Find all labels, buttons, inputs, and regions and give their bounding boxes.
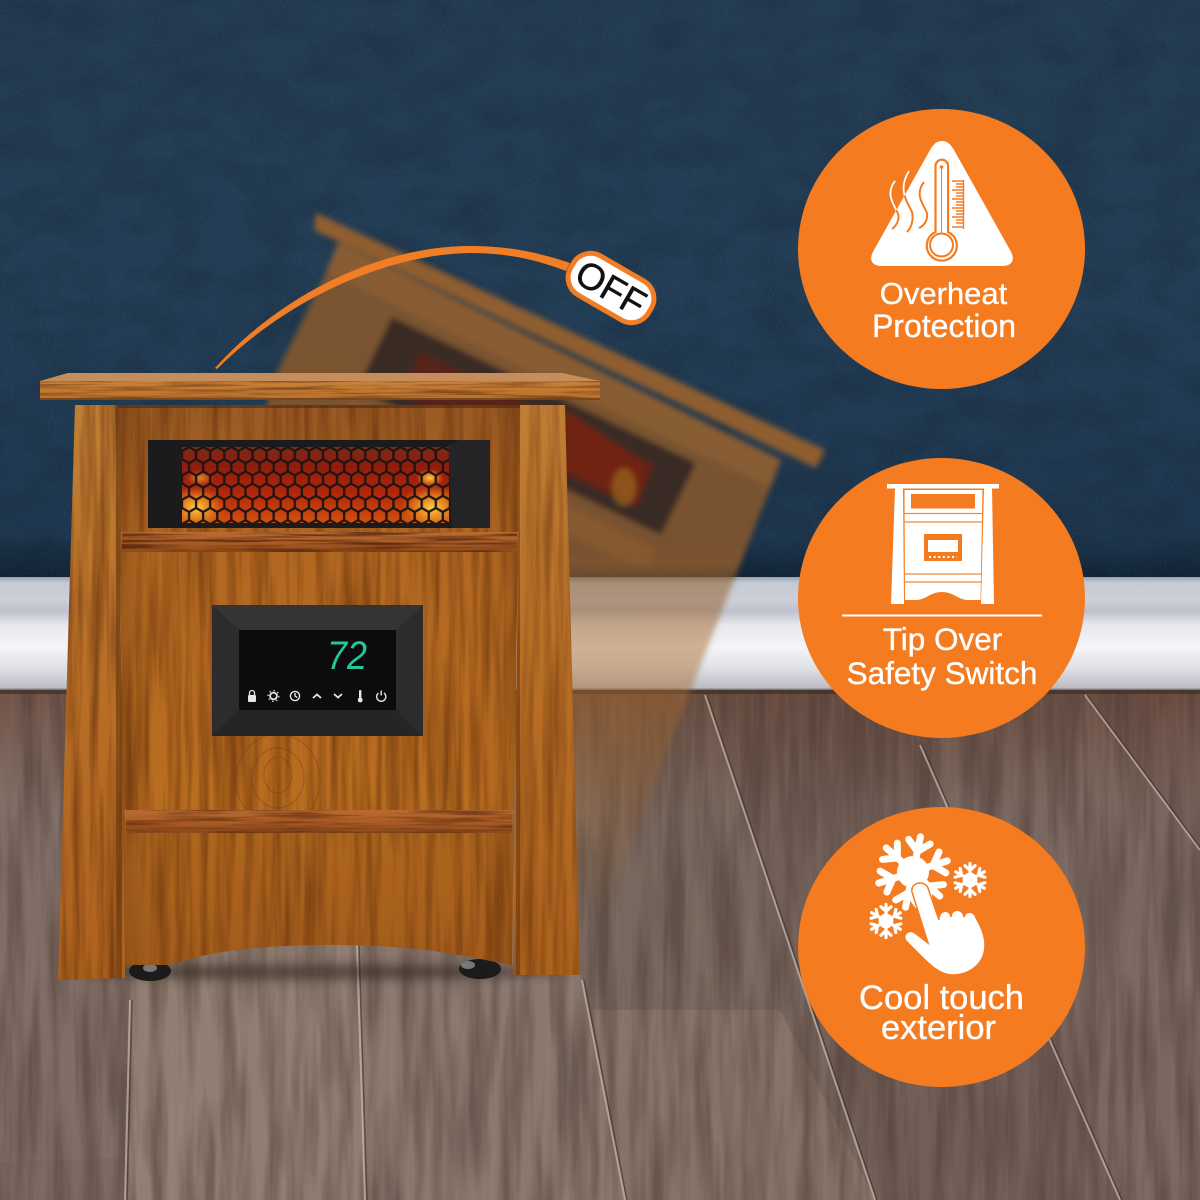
icon: pointing hand — [905, 883, 985, 975]
upper shelf rail — [121, 532, 518, 552]
background: wooden floor planks — [0, 688, 1200, 1200]
ghost heater top board — [314, 213, 825, 468]
label: tip over safety switch: Tip Over — [883, 621, 1002, 657]
heat waves inside triangle — [892, 181, 928, 233]
icon: small snowflake left — [869, 904, 903, 938]
label: tip over safety switch: Safety Switch — [847, 655, 1037, 691]
curved tilt arrow line — [215, 246, 570, 369]
label: overheat protection: Protection — [872, 308, 1016, 344]
main heater cabinet — [40, 373, 600, 985]
hexagonal glowing mesh — [182, 447, 449, 523]
caster wheel left — [129, 961, 171, 981]
feature badge: cool touch exterior — [798, 807, 1085, 1087]
caster wheel right — [459, 959, 501, 979]
button: power — [377, 690, 386, 701]
button: down — [334, 694, 342, 698]
icon: warning triangle with thermometer — [871, 141, 1013, 266]
heat waves outside triangle — [890, 171, 927, 232]
ghost heater body — [263, 242, 772, 870]
thermometer — [927, 160, 964, 261]
background: white baseboard — [0, 577, 1200, 691]
label: overheat protection: Overheat — [880, 276, 1008, 311]
icon: heater outline — [887, 484, 999, 604]
right leg — [513, 405, 580, 975]
button: timer — [290, 691, 300, 701]
ghost heater red glow — [565, 410, 650, 505]
button: temperature — [358, 690, 363, 702]
feature badge: overheat protection — [798, 109, 1085, 389]
ghost heater red element — [400, 352, 655, 508]
ghost heater yellow glow — [612, 468, 636, 506]
feature badge: tip over safety switch — [798, 458, 1085, 738]
LCD display — [239, 630, 396, 710]
label: cool touch exterior: exterior — [881, 1009, 996, 1047]
heat grill housing — [148, 440, 490, 532]
control panel — [212, 605, 423, 736]
OFF text: OFF — [568, 252, 653, 325]
button: lock — [248, 690, 256, 702]
icon: small snowflake right — [953, 863, 987, 897]
heater floor shadow — [70, 964, 570, 980]
ghost heater dark grill — [357, 317, 696, 535]
ghost heater tilting over — [263, 211, 828, 870]
button: up — [313, 694, 321, 698]
label: cool touch exterior: Cool touch — [859, 979, 1024, 1017]
button: brightness — [268, 691, 279, 701]
left leg — [58, 405, 125, 980]
OFF label pill — [561, 246, 661, 330]
background: navy wall — [0, 0, 1200, 580]
ghost heater upper strip — [326, 243, 781, 488]
top board — [40, 373, 600, 401]
cabinet front panel — [110, 400, 530, 970]
icon: large snowflake — [870, 829, 956, 915]
ground line — [842, 614, 1042, 616]
ghost heater shelf — [349, 402, 652, 563]
lower shelf rail — [124, 810, 514, 833]
temperature readout: 72 — [327, 634, 367, 678]
